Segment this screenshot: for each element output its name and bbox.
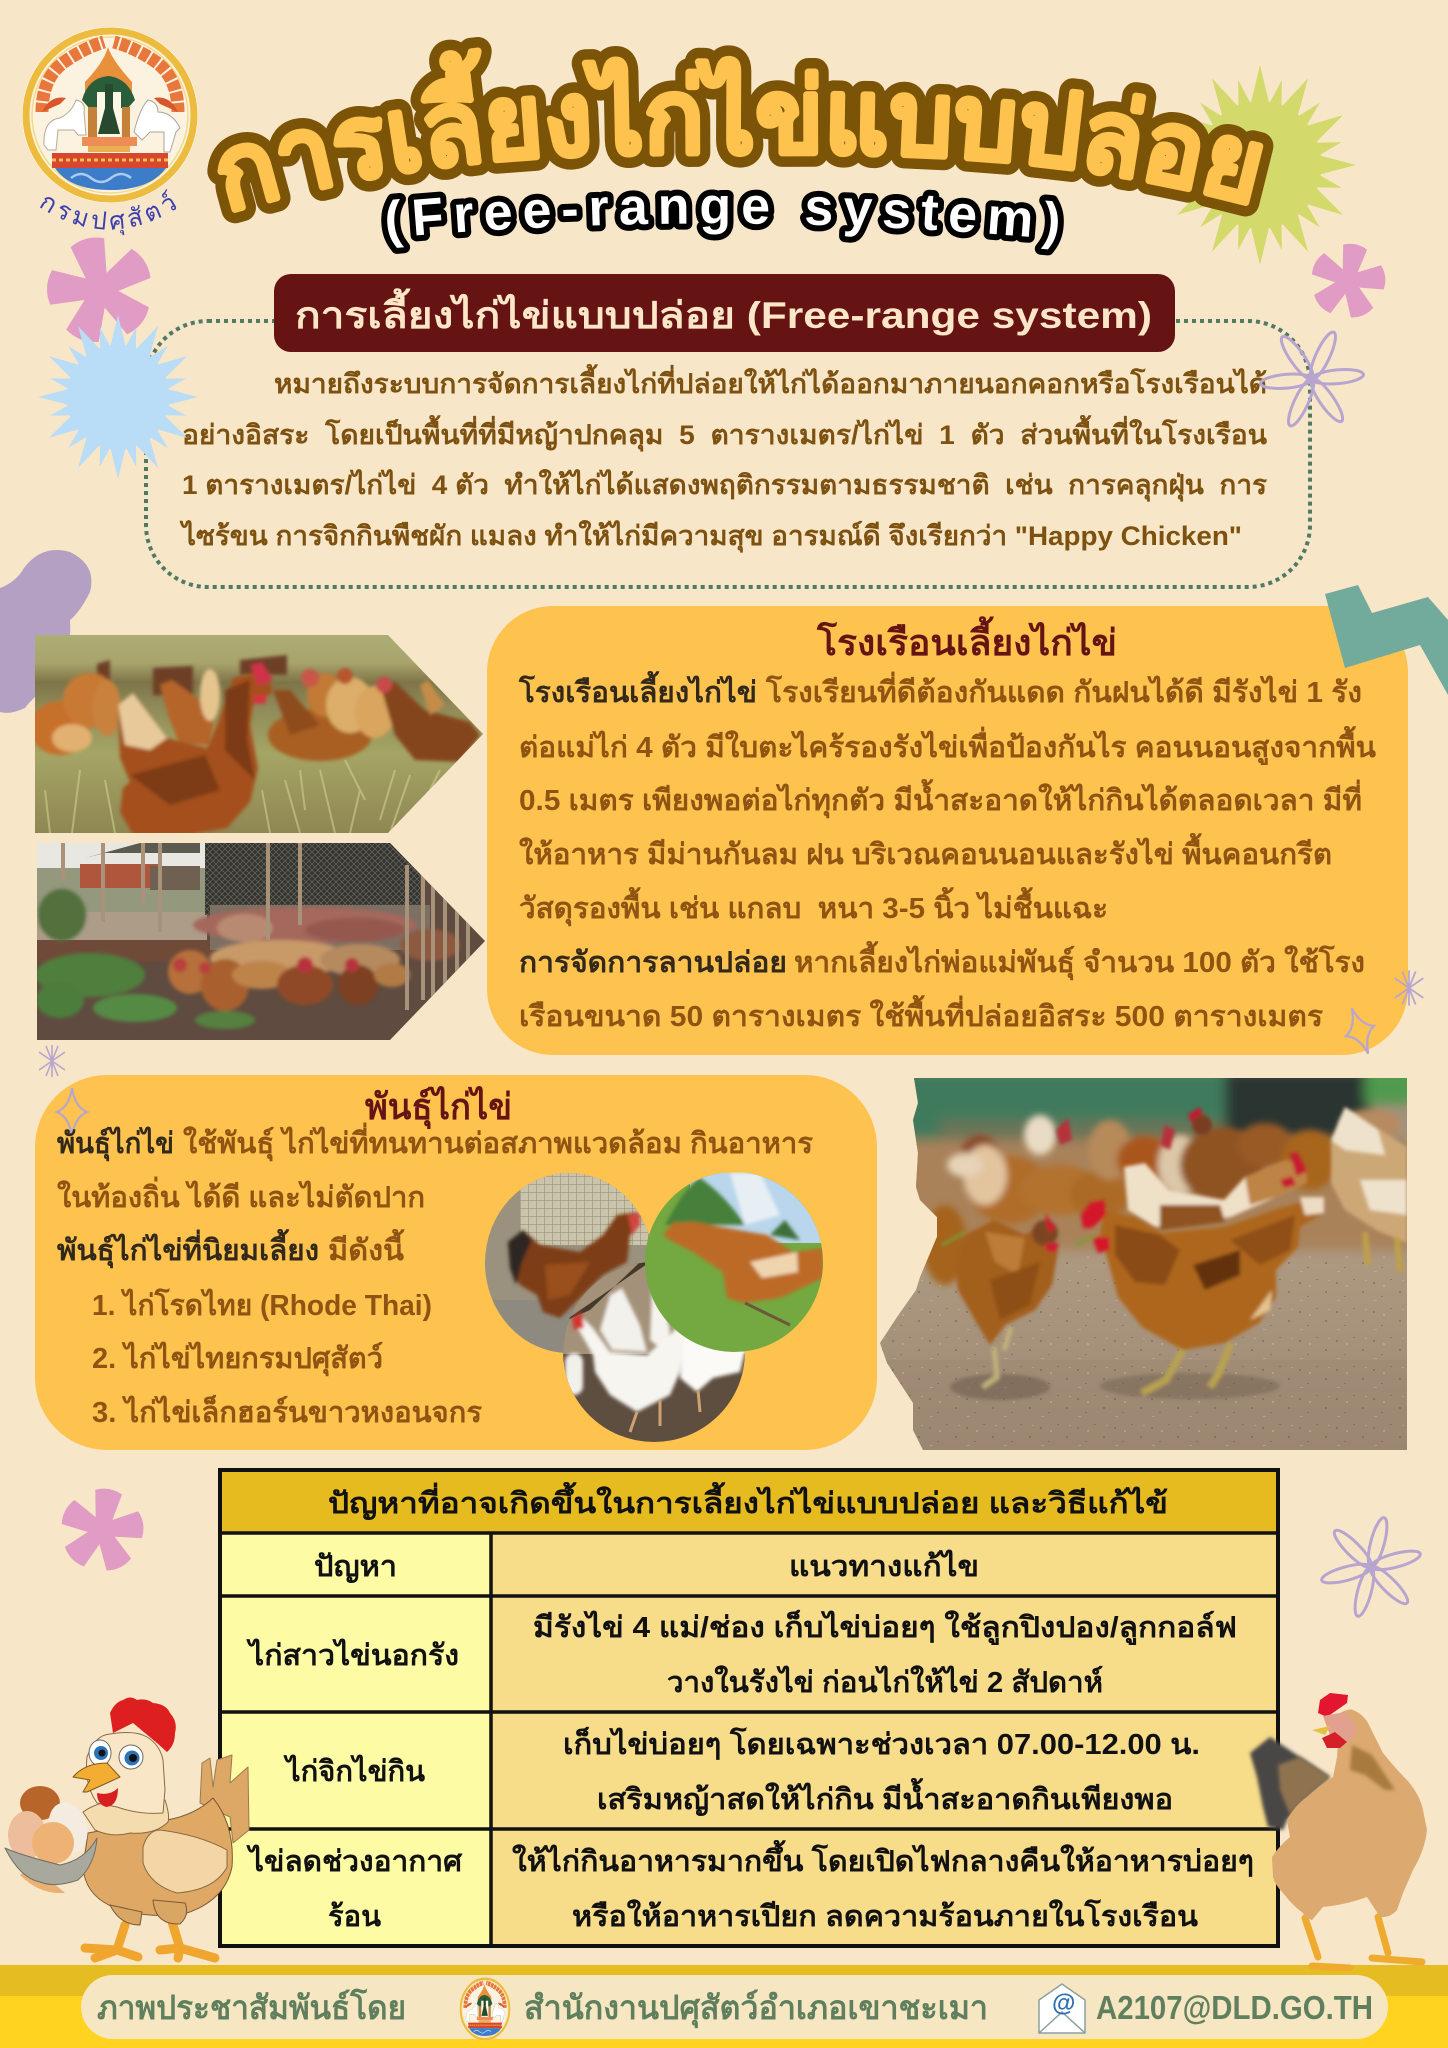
main hen (118, 662, 273, 835)
text block: breeds: มีดังนี้ (328, 1228, 405, 1267)
decorative: lavender flower (1247, 312, 1377, 446)
eggs in bowl (5, 1786, 97, 1893)
text block: housing: วัสดุรองพื้น เช่น แกลบ หนา 3-5 นิ้ว ไม่ชื้นแฉะ (519, 886, 1108, 926)
text block: breeds: 1. ไก่โรดไทย (Rhode Thai) (92, 1287, 432, 1322)
heading text: การเลี้ยงไก่ไข่แบบปล่อย (Free-range system) (295, 288, 1152, 336)
text block: housing: การจัดการลานปล่อย (519, 947, 787, 979)
row 2: ไก่จิกไข่กิน (283, 1754, 425, 1788)
background hens (923, 1109, 1400, 1285)
table title: ปัญหาที่อาจเกิดขึ้นในการเลี้ยงไก่ไข่แบบปล่อย และวิธีแก้ไข้ (328, 1481, 1168, 1521)
heading: breeds: พันธุ์ไก่ไข่ (365, 1085, 512, 1130)
panel: housing (487, 606, 1408, 1055)
panel: definition dotted box (146, 321, 1310, 587)
photo: brown hen in cage (485, 1173, 655, 1355)
decorative: lavender flower lower right (1312, 1505, 1430, 1629)
thighs (110, 1900, 187, 1925)
text block: breeds: 3. ไก่ไข่เล็กฮอร์นขาวหงอนจกร (92, 1394, 482, 1429)
text block: definition: หมายถึงระบบการจัดการเลี้ยงไก่ที่ปล่อยให้ไก่ได้ออกมาภายนอกคอกหรือโรงเรือนได้ (274, 363, 1267, 399)
heading pill (274, 274, 1175, 352)
white hen behind (1122, 1160, 1275, 1230)
beak and wattle (73, 1763, 120, 1792)
row 3 (246, 1839, 1254, 1933)
title: การเลี้ยงไก่ไข่แบบปล่อย (218, 48, 1264, 213)
text block: housing: โรงเรียนที่ดีต้องกันแดด กันฝนได้ดี มีรังไข่ 1 รัง (765, 671, 1362, 709)
decorative: blue starburst (0, 276, 236, 518)
table: problems and solutions (219, 1470, 1279, 1946)
subtitle: (Free-range system) (381, 190, 1064, 256)
text block: housing: ให้อาหาร มีม่านกันลม ฝน บริเวณคอนนอนและรังไข่ พื้นคอนกรีต (519, 832, 1332, 871)
text block: breeds: พันธุ์ไก่ไข่ที่นิยมเลี้ยง (57, 1228, 319, 1268)
photo: hens in grass (30, 635, 485, 835)
photo: hens on soil (880, 1070, 1415, 1450)
footer: mini logo (459, 1977, 511, 2041)
text block: breeds: ใช้พันธุ์ ไก่ไข่ที่ทนทานต่อสภาพแวดล้อม กินอาหาร (183, 1122, 813, 1161)
title: การเลี้ยงไก่ไข่แบบปล่อย (207, 37, 1274, 224)
column header: problem: ปัญหา (314, 1551, 397, 1584)
back hen head (1186, 1106, 1204, 1124)
text block: breeds: ในท้องถิ่น ได้ดี และไม่ตัดปาก (57, 1176, 425, 1214)
text block: definition: อย่างอิสระ โดยเป็นพื้นที่ที่มีหญ้าปกคลุม 5 ตารางเมตร/ไก่ไข่ 1 ตัว ส่วนพื้นที่ในโรงเรือน (182, 414, 1268, 452)
logo caption: กรมปศุสัตว์ (40, 189, 176, 236)
row 1: ไก่สาวไข่นอกรัง (246, 1638, 459, 1672)
text block: definition: 1 ตารางเมตร/ไก่ไข่ 4 ตัว ทำให้ไก่ได้แสดงพฤติกรรมตามธรรมชาติ เช่น การคลุกฝุ่น การ (182, 469, 1267, 502)
dark tail (1250, 1737, 1330, 1830)
photo: hens at coop (35, 843, 487, 1040)
text block: housing: 0.5 เมตร เพียงพอต่อไก่ทุกตัว มีน้ำสะอาดให้ไก่กินได้ตลอดเวลา มีที่ (519, 778, 1362, 818)
text block: housing: โรงเรือนเลี้ยงไก่ไข่ (518, 670, 757, 709)
row 1: วางในรังไข่ ก่อนไก่ให้ไข่ 2 สัปดาห์ (667, 1665, 1103, 1699)
decorative sparkle (57, 1088, 87, 1136)
body (83, 1798, 232, 1915)
comb (1318, 1693, 1348, 1717)
main hen (942, 1197, 1324, 1400)
text block: housing: หากเลี้ยงไก่พ่อแม่พันธุ์ จำนวน 100 ตัว ใช้โรง (794, 940, 1365, 980)
head (86, 1733, 165, 1813)
illustration: cartoon hen with eggs (5, 1698, 249, 1958)
face and wattle (1323, 1712, 1358, 1742)
row 2: เสริมหญ้าสดให้ไก่กิน มีน้ำสะอาดกินเพียงพอ (597, 1777, 1173, 1817)
footer: credit label: ภาพประชาสัมพันธ์โดย (97, 1988, 406, 2026)
legs (1305, 1917, 1422, 1968)
decorative: sparkle star right (1338, 1003, 1382, 1059)
decorative: purple blob (0, 550, 91, 713)
decorative: sparkle asterisk right (1395, 970, 1423, 1006)
text block: housing (518, 670, 1376, 1033)
text block: breeds: พันธุ์ไก่ไข่ (57, 1126, 174, 1161)
tail (200, 1755, 249, 1843)
right cream hens (1331, 1107, 1407, 1243)
background foliage (880, 1070, 1415, 1250)
footer band (0, 1965, 1448, 2048)
neck ruff (83, 1800, 169, 1835)
body (1272, 1709, 1427, 1920)
icon: envelope (1039, 1984, 1085, 2033)
text block: housing: ต่อแม่ไก่ 4 ตัว มีใบตะไคร้รองรังไข่เพื่อป้องกันไร คอนนอนสูงจากพื้น (519, 725, 1376, 765)
wing (143, 1830, 227, 1893)
decorative: pink flower top left (32, 224, 168, 356)
row 1: มีรังไข่ 4 แม่/ช่อง เก็บไข่บ่อยๆ ใช้ลูกปิงปอง/ลูกกอล์ฟ (533, 1609, 1237, 1645)
text block: definition (179, 363, 1268, 553)
text block: definition: ไซร้ขน การจิกกินพืชผัก แมลง ทำให้ไก่มีความสุข อารมณ์ดี จึงเรียกว่า "Happy Chicken" (179, 520, 1242, 553)
decorative: pink flower lower left (52, 1481, 152, 1579)
row 3: ให้ไก่กินอาหารมากขึ้น โดยเปิดไฟกลางคืนให้อาหารบ่อยๆ (512, 1839, 1254, 1878)
panel: breeds (35, 1075, 877, 1450)
text block: breeds: 2. ไก่ไข่ไทยกรมปศุสัตว์ (92, 1341, 383, 1376)
photo: orange hen on grass (645, 1173, 825, 1353)
decorative: pink flower top right (1302, 236, 1394, 326)
decorative: green starburst (1119, 18, 1401, 312)
eyes (89, 1740, 143, 1769)
decorative: sparkle asterisk left (39, 1045, 65, 1077)
footer: email: A2107@DLD.GO.TH (1096, 1989, 1373, 2026)
column header: solution: แนวทางแก้ไข (789, 1549, 979, 1583)
photo: standing hen right (1250, 1693, 1427, 1968)
row 3: ไข่ลดช่วงอากาศ (246, 1844, 463, 1878)
photo: white hens (563, 1262, 747, 1444)
footer: office name: สำนักงานปศุสัตว์อำเภอเขาชะเมา (524, 1989, 988, 2029)
row 1 (246, 1609, 1237, 1699)
logo: department of livestock (22, 27, 198, 236)
row 3: ร้อน (328, 1901, 381, 1933)
comb (110, 1698, 176, 1752)
row 2: เก็บไข่บ่อยๆ โดยเฉพาะช่วงเวลา 07.00-12.00 น. (563, 1726, 1200, 1761)
heading: housing: โรงเรือนเลี้ยงไก่ไข่ (816, 616, 1117, 663)
beak (1312, 1726, 1330, 1735)
row 2 (283, 1726, 1200, 1817)
neck speckle (1350, 1745, 1395, 1790)
text block: breeds (57, 1122, 813, 1429)
text block: housing: เรือนขนาด 50 ตารางเมตร ใช้พื้นที่ปล่อยอิสระ 500 ตารางเมตร (519, 994, 1323, 1033)
decorative: teal zigzag (1325, 585, 1448, 695)
icon: envelope: @ (1052, 1990, 1075, 2017)
row 3: หรือให้อาหารเปียก ลดความร้อนภายในโรงเรือน (572, 1898, 1198, 1933)
legs (85, 1922, 215, 1958)
